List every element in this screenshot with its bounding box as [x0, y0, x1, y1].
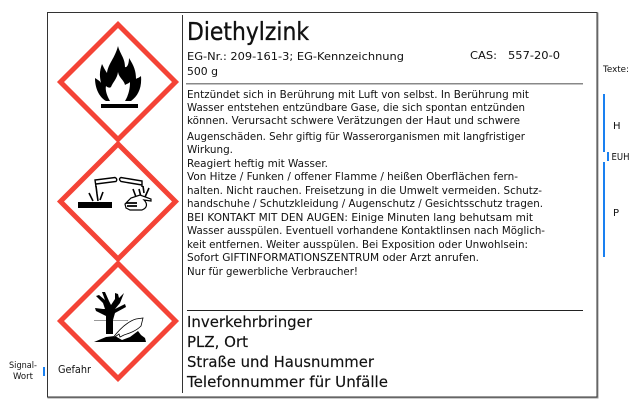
supplier block: Inverkehrbringer	[187, 313, 313, 331]
hazard and precautionary text: Nur für gewerbliche Verbraucher!	[187, 265, 358, 278]
hazard and precautionary text: halten. Nicht rauchen. Freisetzung in die Umwelt vermeiden. Schutz-	[187, 184, 542, 197]
annotation: signal word	[9, 361, 45, 382]
identifier block: 557-20-0	[508, 49, 560, 62]
supplier block: Straße und Hausnummer	[187, 353, 375, 371]
annotation: EUH bracket: EUH	[612, 152, 630, 163]
hazard and precautionary text: können. Verursacht schwere Verätzungen der Haut und schwere	[187, 114, 520, 127]
title: Diethylzink	[187, 17, 309, 46]
icon: environment pictogram	[60, 264, 176, 378]
annotation: P bracket: P	[613, 208, 619, 219]
identifier block: CAS:	[470, 49, 497, 62]
supplier block: PLZ, Ort	[187, 333, 248, 351]
annotation: P bracket	[603, 162, 619, 257]
annotation: texts heading: Texte:	[602, 65, 629, 75]
hazard and precautionary text: Reagiert heftig mit Wasser.	[187, 157, 328, 170]
hazard and precautionary text: Von Hitze / Funken / offener Flamme / heißen Oberflächen fern-	[187, 170, 518, 183]
hazard and precautionary text: Wasser entstehen entzündbare Gase, die sich spontan entzünden	[187, 101, 525, 114]
icon: flame pictogram	[60, 24, 176, 140]
annotation: signal word: Signal-	[9, 361, 37, 371]
hazard and precautionary text: Entzündet sich in Berührung mit Luft von selbst. In Berührung mit	[187, 88, 529, 101]
upper rule	[186, 83, 583, 84]
annotation: H bracket	[603, 94, 621, 152]
annotation: signal word: Wort	[13, 372, 33, 382]
identifier block: 500 g	[187, 65, 218, 78]
identifier block	[187, 49, 560, 78]
icon: corrosion pictogram	[60, 144, 176, 259]
hazard and precautionary text: Sofort GIFTINFORMATIONSZENTRUM oder Arzt anrufen.	[187, 251, 479, 264]
hazard and precautionary text: Wasser ausspülen. Eventuell vorhandene Kontaktlinsen nach Möglich-	[187, 224, 545, 237]
hazard and precautionary text: Augenschäden. Sehr giftig für Wasserorganismen mit langfristiger	[187, 130, 526, 143]
signal word: Gefahr	[58, 363, 91, 376]
supplier block	[186, 313, 388, 391]
column divider	[182, 15, 184, 393]
hazard and precautionary text: handschuhe / Schutzkleidung / Augenschutz / Gesichtsschutz tragen.	[187, 197, 543, 210]
lower rule	[187, 310, 583, 311]
identifier block: EG-Nr.: 209-161-3; EG-Kennzeichnung	[187, 50, 404, 63]
hazard and precautionary text: BEI KONTAKT MIT DEN AUGEN: Einige Minuten lang behutsam mit	[187, 211, 533, 224]
hazard and precautionary text: Wirkung.	[187, 143, 233, 156]
annotation: H bracket: H	[613, 121, 621, 132]
hazard and precautionary text	[187, 88, 545, 278]
hazard and precautionary text: keit entfernen. Weiter ausspülen. Bei Exposition oder Unwohlsein:	[187, 238, 528, 251]
supplier block: Telefonnummer für Unfälle	[186, 373, 388, 391]
